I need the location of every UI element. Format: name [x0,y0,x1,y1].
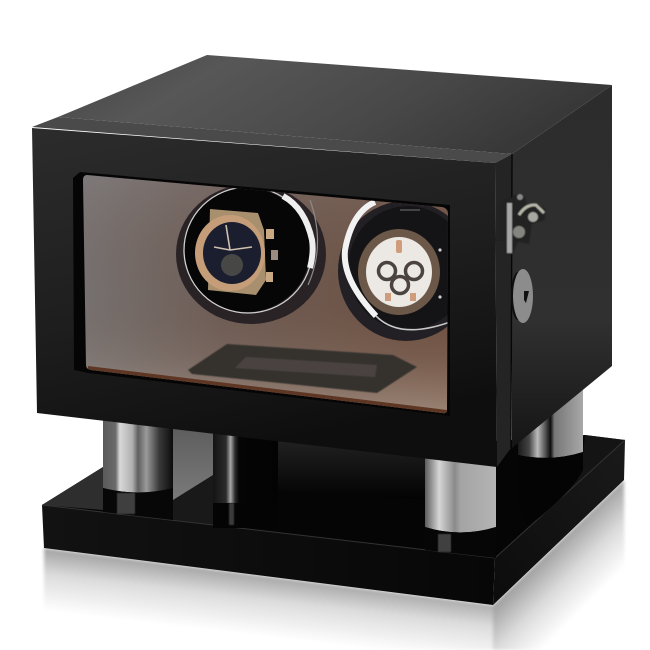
watch: left [195,209,278,295]
base plinth [42,435,625,605]
winder cup: left [176,184,326,324]
cabinet: top face [58,55,612,154]
cabinet: right side face [495,85,612,467]
floor reflection [44,480,625,650]
window rim [73,172,450,416]
cabinet: lid front strip [32,117,512,163]
pillar: front right [425,450,496,558]
winder cup: right [338,200,448,341]
latch hardware [498,194,545,255]
background gap between pillars [173,420,430,500]
watch: right [358,229,440,315]
window [83,175,448,414]
window bottom edge glow [88,366,447,414]
pillar: back right [518,385,583,527]
accessory tray [188,344,417,393]
glass tint overlay [80,170,452,420]
pillar: front left [103,415,173,520]
keyhole escutcheon [511,269,533,323]
pillar: middle [213,420,278,528]
cabinet: front face [32,128,497,467]
